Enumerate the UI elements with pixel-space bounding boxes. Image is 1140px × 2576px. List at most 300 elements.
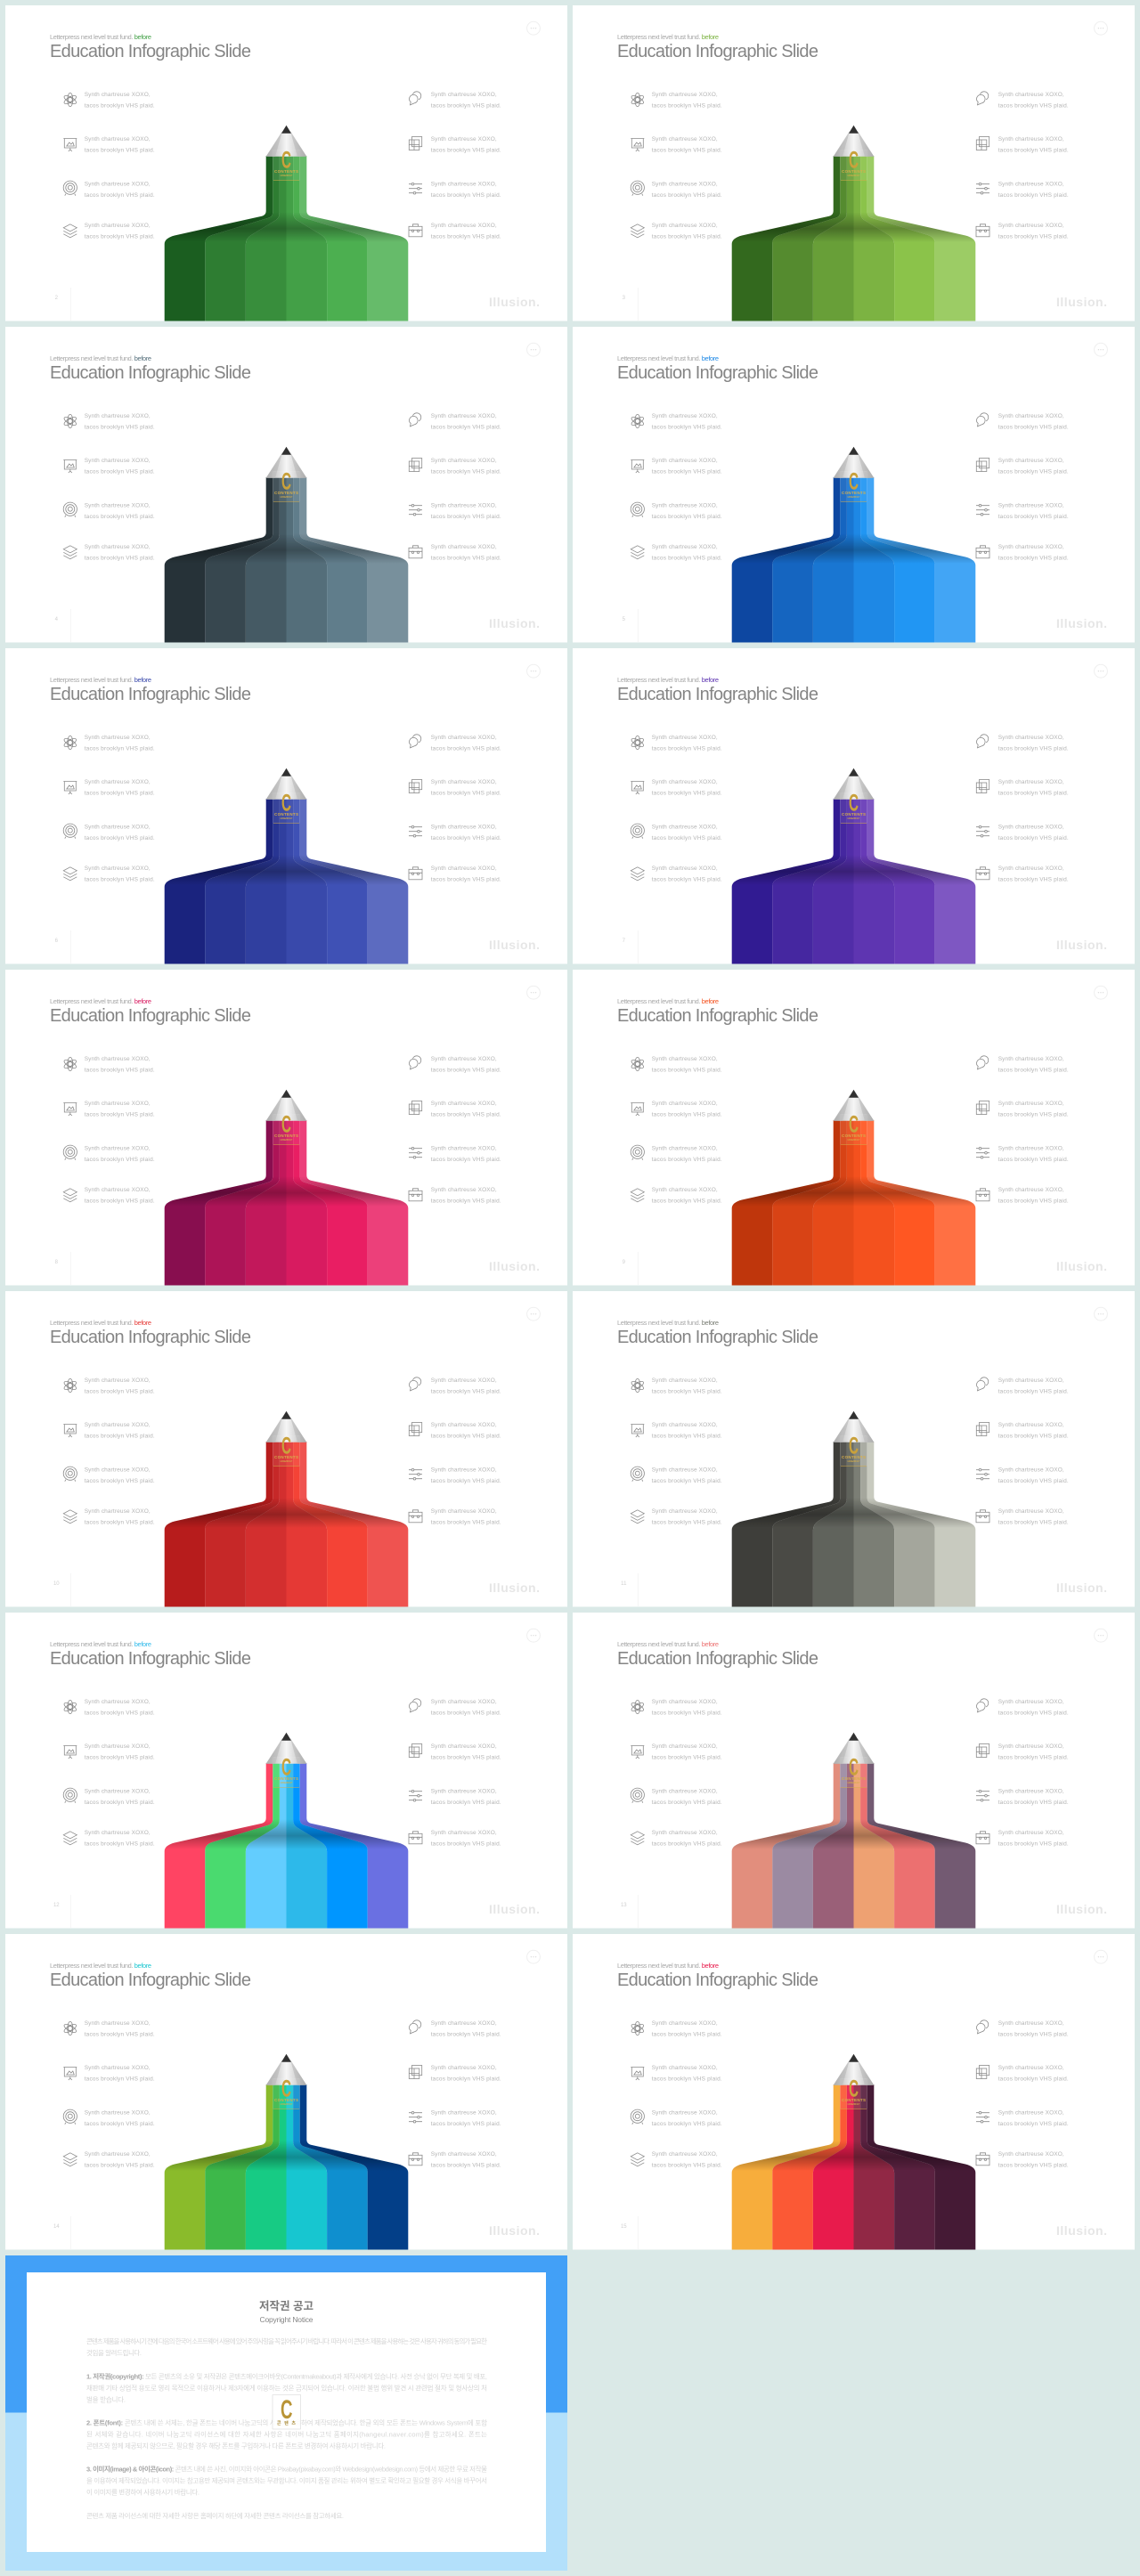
panel: slide 12 rainbow bbox=[5, 1613, 567, 1929]
pencil: C bbox=[849, 789, 859, 816]
item: sliders: Synth chartreuse XOXO, bbox=[431, 503, 497, 509]
item: briefcase: tacos brooklyn VHS plaid. bbox=[998, 2162, 1069, 2169]
item: target: Synth chartreuse XOXO, bbox=[85, 503, 151, 509]
list: left items bbox=[63, 1056, 155, 1204]
item: squares: tacos brooklyn VHS plaid. bbox=[998, 1111, 1069, 1118]
item: sliders: Synth chartreuse XOXO, bbox=[998, 1146, 1064, 1152]
brand mark: Illusion. bbox=[489, 1259, 540, 1273]
heading: Education Infographic Slide bbox=[617, 363, 818, 383]
item: target: Synth chartreuse XOXO, bbox=[652, 1146, 718, 1152]
subtitle: Letterpress next level trust fund. before bbox=[50, 33, 151, 41]
pencil: MAKEABOUT bbox=[280, 1459, 293, 1463]
list: left items bbox=[63, 2020, 155, 2169]
list: left items bbox=[631, 2020, 722, 2169]
item: layers: Synth chartreuse XOXO, bbox=[652, 2151, 718, 2158]
item: layers: tacos brooklyn VHS plaid. bbox=[85, 233, 155, 240]
list: right items bbox=[409, 413, 501, 561]
item: briefcase: tacos brooklyn VHS plaid. bbox=[431, 556, 501, 561]
item: briefcase: Synth chartreuse XOXO, bbox=[431, 2151, 497, 2158]
item: atom: tacos brooklyn VHS plaid. bbox=[85, 746, 155, 752]
list: left items bbox=[63, 92, 155, 240]
item: presentation bbox=[63, 779, 155, 796]
watermark logo bbox=[273, 2395, 301, 2429]
item: layers bbox=[631, 223, 722, 240]
item: presentation bbox=[631, 779, 722, 796]
list: left items bbox=[631, 1056, 722, 1204]
heading: Education Infographic Slide bbox=[50, 685, 251, 704]
pencil: CONTENTS bbox=[274, 169, 298, 174]
item: target: tacos brooklyn VHS plaid. bbox=[652, 1157, 722, 1163]
item: target bbox=[63, 824, 155, 841]
item: briefcase bbox=[976, 223, 1069, 240]
pencil: C bbox=[281, 1432, 291, 1459]
copyright intro: 콘텐츠 제품을 사용하시기 전에 다음의 한국어 소프트웨어 사용에 있어 주의사항을 꼭 읽어주시기 바랍니다. 따라서 이 콘텐츠 제품을 사용하는 것은 사용자 귀하의 동의가 필요한 bbox=[86, 2336, 487, 2345]
item: briefcase: tacos brooklyn VHS plaid. bbox=[998, 1519, 1069, 1526]
item: briefcase bbox=[409, 223, 501, 240]
item: presentation bbox=[63, 1101, 155, 1118]
item: chat bbox=[409, 2020, 501, 2037]
pencil bbox=[165, 2054, 408, 2249]
pencil bbox=[165, 1733, 408, 1929]
item: presentation: Synth chartreuse XOXO, bbox=[652, 2065, 718, 2071]
subtitle: Letterpress next level trust fund. before bbox=[617, 676, 719, 684]
item: chat: Synth chartreuse XOXO, bbox=[431, 1377, 497, 1384]
item: atom: tacos brooklyn VHS plaid. bbox=[652, 2032, 722, 2037]
list: right items bbox=[409, 2020, 501, 2169]
item: presentation bbox=[63, 2065, 155, 2082]
item: layers: tacos brooklyn VHS plaid. bbox=[652, 1519, 722, 1526]
item: briefcase bbox=[976, 1187, 1069, 1204]
list: right items bbox=[976, 1056, 1069, 1204]
icon: smiley badge bbox=[1095, 664, 1107, 678]
item: squares: Synth chartreuse XOXO, bbox=[998, 136, 1064, 142]
pencil bbox=[165, 768, 408, 963]
item: briefcase: Synth chartreuse XOXO, bbox=[431, 223, 497, 229]
panel: slide 2 green bbox=[5, 5, 567, 321]
watermark logo: 콘텐츠 bbox=[277, 2420, 296, 2426]
item: squares: Synth chartreuse XOXO, bbox=[998, 779, 1064, 785]
item: layers: tacos brooklyn VHS plaid. bbox=[85, 876, 155, 883]
list: right items bbox=[409, 92, 501, 240]
subtitle: Letterpress next level trust fund. before bbox=[617, 1640, 719, 1648]
page number: 8 bbox=[55, 1260, 59, 1265]
item: target: tacos brooklyn VHS plaid. bbox=[85, 514, 155, 520]
item: briefcase: tacos brooklyn VHS plaid. bbox=[431, 2162, 501, 2169]
item: briefcase: Synth chartreuse XOXO, bbox=[998, 544, 1064, 550]
item: atom: tacos brooklyn VHS plaid. bbox=[652, 1067, 722, 1074]
item: briefcase: Synth chartreuse XOXO, bbox=[998, 1830, 1064, 1836]
item: presentation: Synth chartreuse XOXO, bbox=[85, 458, 151, 464]
item: presentation bbox=[631, 1101, 722, 1118]
heading: Education Infographic Slide bbox=[617, 1006, 818, 1026]
item: chat bbox=[409, 92, 501, 109]
item: sliders: tacos brooklyn VHS plaid. bbox=[431, 1478, 501, 1484]
brand mark: Illusion. bbox=[489, 295, 540, 309]
subtitle: Letterpress next level trust fund. before bbox=[50, 997, 151, 1005]
item: target: Synth chartreuse XOXO, bbox=[652, 182, 718, 188]
item: layers: tacos brooklyn VHS plaid. bbox=[85, 1199, 155, 1204]
item: presentation: tacos brooklyn VHS plaid. bbox=[652, 2076, 722, 2082]
item: briefcase: Synth chartreuse XOXO, bbox=[431, 1508, 497, 1515]
item: layers: Synth chartreuse XOXO, bbox=[652, 223, 718, 229]
item: squares: tacos brooklyn VHS plaid. bbox=[431, 468, 501, 475]
item: briefcase: tacos brooklyn VHS plaid. bbox=[998, 1841, 1069, 1847]
item: sliders bbox=[976, 1788, 1069, 1806]
item: chat: tacos brooklyn VHS plaid. bbox=[998, 2032, 1069, 2037]
item: layers bbox=[63, 1187, 155, 1204]
item: chat bbox=[976, 1377, 1069, 1394]
pencil: C bbox=[849, 1753, 859, 1780]
item: target bbox=[631, 824, 722, 841]
item: target: Synth chartreuse XOXO, bbox=[85, 182, 151, 188]
page number: 4 bbox=[55, 617, 59, 622]
item: layers bbox=[63, 2151, 155, 2169]
item: target: tacos brooklyn VHS plaid. bbox=[85, 1478, 155, 1484]
item: briefcase: tacos brooklyn VHS plaid. bbox=[431, 876, 501, 883]
panel: slide 8 pink bbox=[5, 970, 567, 1286]
brand mark: Illusion. bbox=[1056, 295, 1107, 309]
item: presentation bbox=[631, 136, 722, 153]
pencil: C bbox=[849, 146, 859, 173]
item: briefcase: Synth chartreuse XOXO, bbox=[998, 1508, 1064, 1515]
item: layers bbox=[631, 1830, 722, 1847]
item: target bbox=[63, 502, 155, 520]
item: squares: Synth chartreuse XOXO, bbox=[431, 779, 497, 785]
item: chat bbox=[976, 1056, 1069, 1074]
brand mark: Illusion. bbox=[1056, 2223, 1107, 2238]
item: atom bbox=[631, 2020, 722, 2037]
item: target: Synth chartreuse XOXO, bbox=[85, 1467, 151, 1474]
item: presentation: tacos brooklyn VHS plaid. bbox=[85, 791, 155, 796]
item: briefcase: tacos brooklyn VHS plaid. bbox=[998, 1199, 1069, 1204]
pencil bbox=[732, 126, 975, 321]
item: presentation: tacos brooklyn VHS plaid. bbox=[85, 468, 155, 475]
item: sliders bbox=[409, 502, 501, 520]
item: squares: tacos brooklyn VHS plaid. bbox=[998, 148, 1069, 153]
item: atom bbox=[631, 1377, 722, 1394]
item: sliders: Synth chartreuse XOXO, bbox=[998, 503, 1064, 509]
subtitle: Letterpress next level trust fund. before bbox=[617, 1319, 719, 1327]
item: briefcase: tacos brooklyn VHS plaid. bbox=[431, 1841, 501, 1847]
item: atom: Synth chartreuse XOXO, bbox=[652, 1056, 718, 1062]
item: sliders: tacos brooklyn VHS plaid. bbox=[431, 1157, 501, 1163]
item: briefcase bbox=[976, 2151, 1069, 2169]
heading: Education Infographic Slide bbox=[50, 1971, 251, 1990]
item: squares: tacos brooklyn VHS plaid. bbox=[431, 1434, 501, 1439]
item: chat bbox=[409, 1699, 501, 1717]
item: atom: Synth chartreuse XOXO, bbox=[85, 2020, 151, 2027]
pencil: C bbox=[281, 789, 291, 816]
item: target: Synth chartreuse XOXO, bbox=[652, 1789, 718, 1795]
brand mark: Illusion. bbox=[489, 1581, 540, 1595]
item: presentation: Synth chartreuse XOXO, bbox=[85, 1743, 151, 1750]
item: squares bbox=[409, 1101, 501, 1118]
item: target: tacos brooklyn VHS plaid. bbox=[85, 192, 155, 199]
pencil: MAKEABOUT bbox=[848, 817, 860, 820]
pencil bbox=[165, 126, 408, 321]
item: layers: Synth chartreuse XOXO, bbox=[652, 544, 718, 550]
copyright intro: 것임을 알려드립니다. bbox=[86, 2348, 142, 2357]
pencil: CONTENTS bbox=[274, 1776, 298, 1781]
item: sliders: Synth chartreuse XOXO, bbox=[431, 2110, 497, 2117]
item: squares: Synth chartreuse XOXO, bbox=[998, 1743, 1064, 1750]
pencil: C bbox=[849, 467, 859, 494]
copyright clause 1: 재판매 기타 상업적 용도로 영리 목적으로 이용하거나 제3자에게 이용하는 것은 금지되어 있습니다. 이러한 불법 행위 발견 시 관련법 절차 및 형사상의 처 bbox=[86, 2383, 487, 2392]
item: presentation bbox=[63, 1422, 155, 1439]
item: briefcase: tacos brooklyn VHS plaid. bbox=[431, 1199, 501, 1204]
pencil: CONTENTS bbox=[274, 812, 298, 817]
subtitle: Letterpress next level trust fund. before bbox=[50, 676, 151, 684]
heading: Education Infographic Slide bbox=[617, 42, 818, 61]
item: squares: Synth chartreuse XOXO, bbox=[998, 458, 1064, 464]
subtitle: Letterpress next level trust fund. before bbox=[617, 997, 719, 1005]
item: atom: Synth chartreuse XOXO, bbox=[652, 413, 718, 419]
item: target: tacos brooklyn VHS plaid. bbox=[85, 1800, 155, 1806]
item: squares: Synth chartreuse XOXO, bbox=[998, 1101, 1064, 1107]
copyright subheading: Copyright Notice bbox=[260, 2315, 314, 2324]
item: squares: Synth chartreuse XOXO, bbox=[998, 1422, 1064, 1428]
item: presentation: Synth chartreuse XOXO, bbox=[652, 1422, 718, 1428]
item: chat bbox=[976, 92, 1069, 109]
item: briefcase bbox=[409, 865, 501, 883]
item: presentation: tacos brooklyn VHS plaid. bbox=[652, 468, 722, 475]
item: target: Synth chartreuse XOXO, bbox=[652, 825, 718, 831]
pencil: C bbox=[281, 2075, 291, 2101]
item: briefcase: Synth chartreuse XOXO, bbox=[998, 865, 1064, 872]
item: target: Synth chartreuse XOXO, bbox=[85, 1789, 151, 1795]
pencil: MAKEABOUT bbox=[280, 1781, 293, 1784]
item: atom: tacos brooklyn VHS plaid. bbox=[85, 103, 155, 109]
item: chat: tacos brooklyn VHS plaid. bbox=[431, 746, 501, 752]
icon: smiley badge bbox=[1095, 1950, 1107, 1963]
heading: Education Infographic Slide bbox=[617, 1971, 818, 1990]
item: chat bbox=[409, 413, 501, 431]
item: layers: tacos brooklyn VHS plaid. bbox=[652, 2162, 722, 2169]
copyright clause 1: 1. 저작권(copyright): 모든 콘텐츠의 소유 및 저작권은 콘텐츠메이크어바웃(Contentmakeabout)과 제작사에게 있습니다. 사전 승낙 없이 무단 복제 및 배포, bbox=[86, 2372, 487, 2381]
item: sliders bbox=[409, 1788, 501, 1806]
item: atom: tacos brooklyn VHS plaid. bbox=[652, 424, 722, 431]
item: atom: Synth chartreuse XOXO, bbox=[85, 92, 151, 98]
pencil: MAKEABOUT bbox=[280, 1138, 293, 1142]
pencil: MAKEABOUT bbox=[280, 174, 293, 177]
item: presentation: Synth chartreuse XOXO, bbox=[652, 458, 718, 464]
item: atom: tacos brooklyn VHS plaid. bbox=[85, 2032, 155, 2037]
pencil bbox=[165, 1090, 408, 1286]
pencil: CONTENTS bbox=[842, 1134, 866, 1138]
item: presentation: Synth chartreuse XOXO, bbox=[85, 1101, 151, 1107]
panel: slide 3 light green bbox=[573, 5, 1135, 321]
item: chat: Synth chartreuse XOXO, bbox=[431, 1699, 497, 1705]
icon: smiley badge bbox=[1095, 986, 1107, 999]
item: squares bbox=[976, 1101, 1069, 1118]
item: squares bbox=[409, 136, 501, 153]
page number: 14 bbox=[53, 2224, 60, 2230]
item: atom: tacos brooklyn VHS plaid. bbox=[652, 1389, 722, 1394]
item: chat: tacos brooklyn VHS plaid. bbox=[431, 1389, 501, 1394]
item: layers bbox=[63, 1508, 155, 1526]
copyright clause 1: 벌을 받습니다. bbox=[86, 2395, 126, 2404]
pencil bbox=[732, 1733, 975, 1929]
pencil bbox=[165, 1411, 408, 1606]
item: presentation: tacos brooklyn VHS plaid. bbox=[85, 148, 155, 153]
item: layers: tacos brooklyn VHS plaid. bbox=[85, 1841, 155, 1847]
item: squares: tacos brooklyn VHS plaid. bbox=[998, 468, 1069, 475]
copyright clause 3: 을 이용하여 제작되었습니다. 이미지는 참고용만 제공되며 콘텐츠와는 무관합니다. 이미지 품질 관리는 위하여 별도로 확인하고 필요할 경우 서식을 바꾸어서 bbox=[86, 2475, 487, 2484]
item: squares bbox=[976, 136, 1069, 153]
list: left items bbox=[631, 1699, 722, 1847]
item: chat bbox=[409, 1377, 501, 1394]
item: layers: Synth chartreuse XOXO, bbox=[85, 865, 151, 872]
icon: smiley badge bbox=[527, 1307, 540, 1321]
pencil: MAKEABOUT bbox=[280, 2102, 293, 2106]
item: layers: Synth chartreuse XOXO, bbox=[652, 1830, 718, 1836]
item: sliders bbox=[409, 182, 501, 199]
item: briefcase: Synth chartreuse XOXO, bbox=[431, 865, 497, 872]
pencil bbox=[732, 2054, 975, 2249]
list: right items bbox=[976, 2020, 1069, 2169]
brand mark: Illusion. bbox=[489, 938, 540, 952]
item: target: tacos brooklyn VHS plaid. bbox=[85, 835, 155, 841]
icon: smiley badge bbox=[527, 986, 540, 999]
item: target bbox=[63, 1467, 155, 1484]
item: layers bbox=[631, 2151, 722, 2169]
item: chat: tacos brooklyn VHS plaid. bbox=[998, 103, 1069, 109]
item: atom: Synth chartreuse XOXO, bbox=[652, 735, 718, 741]
item: layers: Synth chartreuse XOXO, bbox=[85, 1830, 151, 1836]
item: squares: tacos brooklyn VHS plaid. bbox=[998, 1754, 1069, 1761]
icon: smiley badge bbox=[527, 21, 540, 35]
item: briefcase bbox=[409, 1187, 501, 1204]
icon: smiley badge bbox=[1095, 1307, 1107, 1321]
icon: smiley badge bbox=[1095, 1629, 1107, 1642]
pencil bbox=[732, 447, 975, 643]
subtitle: Letterpress next level trust fund. before bbox=[617, 1962, 719, 1970]
item: target bbox=[63, 181, 155, 199]
copyright heading: 저작권 공고 bbox=[259, 2299, 314, 2312]
panel: copyright notice bbox=[5, 2255, 567, 2571]
item: presentation bbox=[631, 1422, 722, 1439]
item: sliders: Synth chartreuse XOXO, bbox=[431, 182, 497, 188]
list: right items bbox=[409, 1377, 501, 1526]
item: layers: tacos brooklyn VHS plaid. bbox=[85, 1519, 155, 1526]
brand mark: Illusion. bbox=[1056, 1259, 1107, 1273]
item: presentation bbox=[631, 458, 722, 475]
item: squares: tacos brooklyn VHS plaid. bbox=[431, 148, 501, 153]
list: left items bbox=[63, 1699, 155, 1847]
item: atom: Synth chartreuse XOXO, bbox=[85, 1056, 151, 1062]
item: squares: tacos brooklyn VHS plaid. bbox=[998, 791, 1069, 796]
item: atom: tacos brooklyn VHS plaid. bbox=[85, 1710, 155, 1717]
list: left items bbox=[631, 413, 722, 561]
item: chat: tacos brooklyn VHS plaid. bbox=[998, 424, 1069, 431]
item: sliders bbox=[409, 1145, 501, 1163]
item: atom bbox=[63, 735, 155, 752]
brand mark: Illusion. bbox=[1056, 1581, 1107, 1595]
item: chat: Synth chartreuse XOXO, bbox=[431, 413, 497, 419]
item: squares: Synth chartreuse XOXO, bbox=[431, 1101, 497, 1107]
panel: slide 5 blue bbox=[573, 327, 1135, 643]
item: chat: tacos brooklyn VHS plaid. bbox=[431, 1067, 501, 1074]
item: layers: tacos brooklyn VHS plaid. bbox=[652, 1841, 722, 1847]
icon: smiley badge bbox=[527, 343, 540, 356]
item: layers bbox=[631, 544, 722, 561]
item: sliders bbox=[976, 2110, 1069, 2127]
item: target bbox=[631, 181, 722, 199]
item: sliders: tacos brooklyn VHS plaid. bbox=[998, 1800, 1069, 1806]
item: presentation: tacos brooklyn VHS plaid. bbox=[652, 1754, 722, 1761]
item: sliders: Synth chartreuse XOXO, bbox=[998, 1467, 1064, 1474]
item: chat bbox=[976, 735, 1069, 752]
pencil: MAKEABOUT bbox=[280, 817, 293, 820]
item: sliders: tacos brooklyn VHS plaid. bbox=[998, 835, 1069, 841]
list: left items bbox=[631, 1377, 722, 1526]
item: chat: tacos brooklyn VHS plaid. bbox=[431, 103, 501, 109]
item: sliders bbox=[976, 502, 1069, 520]
list: right items bbox=[409, 735, 501, 883]
list: right items bbox=[976, 1699, 1069, 1847]
item: chat: Synth chartreuse XOXO, bbox=[431, 1056, 497, 1062]
page number: 11 bbox=[621, 1581, 627, 1587]
pencil: C bbox=[281, 146, 291, 173]
item: atom: Synth chartreuse XOXO, bbox=[85, 413, 151, 419]
pencil: C bbox=[281, 1753, 291, 1780]
item: atom bbox=[631, 1056, 722, 1074]
item: atom: tacos brooklyn VHS plaid. bbox=[85, 1389, 155, 1394]
item: atom bbox=[631, 735, 722, 752]
item: chat: tacos brooklyn VHS plaid. bbox=[431, 1710, 501, 1717]
item: atom bbox=[631, 1699, 722, 1717]
list: left items bbox=[63, 1377, 155, 1526]
copyright clause 2 bbox=[86, 2418, 487, 2450]
item: layers: Synth chartreuse XOXO, bbox=[85, 1508, 151, 1515]
item: squares bbox=[976, 1743, 1069, 1761]
item: chat: Synth chartreuse XOXO, bbox=[998, 1377, 1064, 1384]
heading: Education Infographic Slide bbox=[617, 1328, 818, 1347]
page number: 10 bbox=[53, 1581, 60, 1587]
item: briefcase bbox=[409, 2151, 501, 2169]
item: target: tacos brooklyn VHS plaid. bbox=[85, 1157, 155, 1163]
pencil: CONTENTS bbox=[842, 1455, 866, 1459]
item: presentation: tacos brooklyn VHS plaid. bbox=[652, 791, 722, 796]
pencil: CONTENTS bbox=[274, 1134, 298, 1138]
icon: smiley badge bbox=[527, 1629, 540, 1642]
panel: slide 14 green to navy bbox=[5, 1934, 567, 2249]
item: squares bbox=[409, 2065, 501, 2082]
pencil: CONTENTS bbox=[842, 812, 866, 817]
item: squares: tacos brooklyn VHS plaid. bbox=[431, 1754, 501, 1761]
brand mark: Illusion. bbox=[489, 616, 540, 630]
item: layers: Synth chartreuse XOXO, bbox=[85, 1187, 151, 1193]
heading: Education Infographic Slide bbox=[50, 42, 251, 61]
pencil: MAKEABOUT bbox=[848, 495, 860, 499]
item: briefcase: tacos brooklyn VHS plaid. bbox=[431, 233, 501, 240]
item: chat: tacos brooklyn VHS plaid. bbox=[998, 746, 1069, 752]
item: briefcase: Synth chartreuse XOXO, bbox=[998, 2151, 1064, 2158]
item: presentation: tacos brooklyn VHS plaid. bbox=[85, 2076, 155, 2082]
page number: 15 bbox=[621, 2224, 627, 2230]
subtitle: Letterpress next level trust fund. before bbox=[50, 1319, 151, 1327]
item: sliders: tacos brooklyn VHS plaid. bbox=[431, 835, 501, 841]
heading: Education Infographic Slide bbox=[50, 1006, 251, 1026]
item: target: Synth chartreuse XOXO, bbox=[85, 825, 151, 831]
pencil: C bbox=[849, 2075, 859, 2101]
item: atom bbox=[63, 1377, 155, 1394]
item: squares: tacos brooklyn VHS plaid. bbox=[431, 1111, 501, 1118]
item: target: Synth chartreuse XOXO, bbox=[652, 2110, 718, 2117]
item: chat: Synth chartreuse XOXO, bbox=[998, 735, 1064, 741]
item: sliders: tacos brooklyn VHS plaid. bbox=[431, 192, 501, 199]
copyright intro bbox=[86, 2336, 487, 2357]
